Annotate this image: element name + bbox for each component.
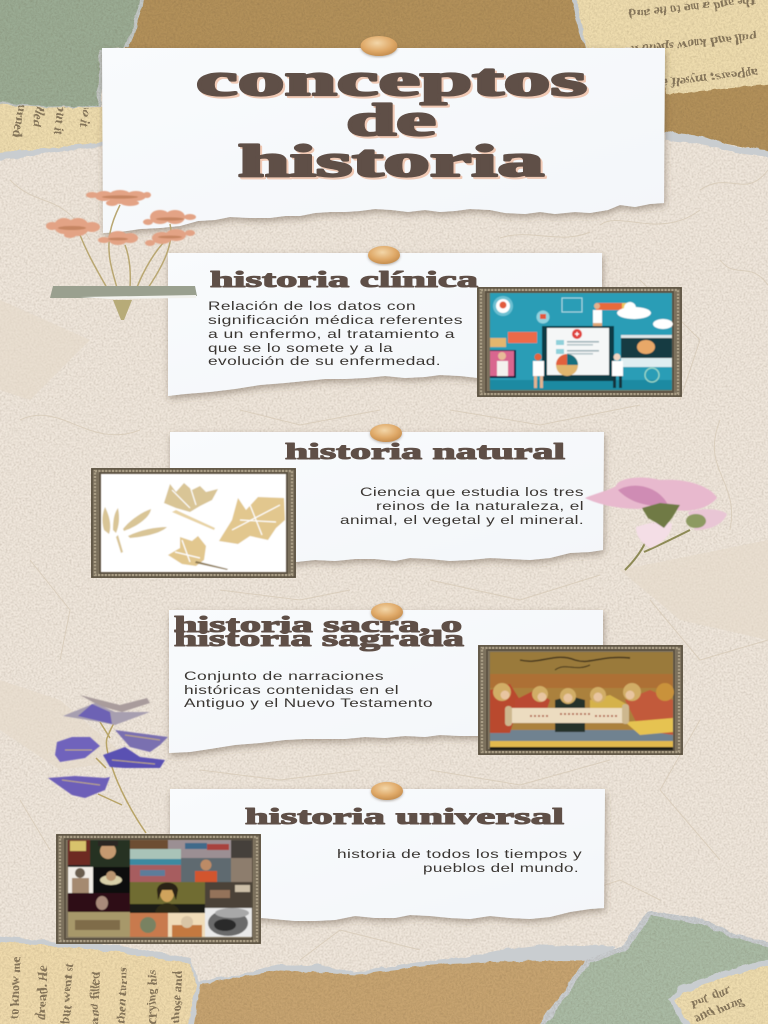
newspaper top-right: appears: myself a twist or — [615, 66, 759, 96]
newspaper bottom-left: but went st — [58, 962, 75, 1024]
heading: historia clínica — [210, 267, 479, 292]
title text: conceptos — [198, 56, 589, 107]
card paper — [169, 610, 603, 753]
heading: historia sacra, o — [174, 612, 462, 637]
panel: historia natural — [91, 424, 604, 578]
description: Ciencia que estudia los tres — [360, 485, 584, 499]
flower: purple sprig — [48, 695, 168, 833]
framed picture: pressed leaves — [91, 468, 296, 578]
newspaper left: but it — [50, 104, 70, 137]
title text: historia — [238, 135, 544, 186]
newspaper bottom-left: to know me — [6, 955, 23, 1020]
grey torn edge right — [664, 131, 768, 158]
description: históricas contenidas en el — [184, 683, 399, 697]
panel: historia clínica — [168, 246, 682, 397]
description: Relación de los datos con — [208, 299, 416, 313]
newspaper left: filled — [30, 98, 49, 129]
title text: de — [348, 96, 438, 147]
torn paper: bottom collage — [0, 911, 768, 1024]
flower: pink rose — [585, 478, 727, 570]
card paper — [170, 432, 604, 570]
heading: historia universal — [245, 804, 564, 829]
description: pueblos del mundo. — [423, 861, 579, 875]
newspaper left: so it — [77, 104, 95, 130]
newspaper bottom-right: put dur — [688, 981, 733, 1010]
newspaper top-right: to my when myself. Y — [640, 102, 761, 129]
newspaper bottom-left: then turns — [113, 966, 130, 1024]
description: historia de todos los tiempos y — [337, 847, 583, 861]
newspaper bottom-left: and filled — [86, 970, 103, 1024]
newspaper left — [0, 103, 102, 161]
newspaper top-right — [572, 0, 768, 94]
framed picture: medical illustration — [477, 287, 682, 397]
description: Antiguo y el Nuevo Testamento — [184, 696, 433, 710]
newspaper bottom-right — [668, 956, 768, 1024]
title pin — [360, 36, 398, 56]
panel: historia sacra — [169, 603, 683, 755]
grey edge above kraft — [197, 945, 616, 990]
framed picture: angels with scroll — [478, 645, 683, 755]
title text — [196, 54, 589, 188]
newspaper top-right: pull and know spend it — [629, 30, 757, 58]
torn paper: top collage — [0, 0, 768, 161]
heading: historia natural — [285, 439, 565, 464]
heading — [174, 612, 465, 651]
description: Conjunto de narraciones — [184, 669, 384, 683]
newspaper bottom-left: those and — [168, 970, 185, 1024]
panel: title card — [102, 36, 665, 233]
green paper top-left — [0, 0, 147, 110]
pin — [368, 246, 400, 264]
newspaper bottom-left: crying his — [143, 969, 160, 1024]
title text: historia — [240, 137, 546, 188]
pin — [371, 782, 403, 800]
newspaper bottom-left: dread. He — [33, 965, 50, 1020]
heading: historia sagrada — [174, 626, 465, 651]
washi tape — [50, 286, 197, 299]
title text: de — [346, 94, 436, 145]
kraft paper top — [125, 0, 768, 154]
flower: peach sprig with tape — [46, 190, 197, 320]
title text: conceptos — [196, 54, 587, 105]
panel: historia universal — [170, 782, 605, 925]
description — [337, 847, 583, 875]
description: que se lo somete y a la — [208, 341, 393, 355]
description — [340, 485, 584, 527]
newspaper bottom-left — [0, 935, 200, 1024]
newspaper left: turned — [10, 99, 31, 139]
title paper — [102, 48, 665, 233]
green paper bottom-right — [531, 911, 768, 1024]
pin — [370, 424, 402, 442]
pin — [371, 603, 403, 621]
description — [208, 299, 463, 368]
description: reinos de la naturaleza, el — [376, 499, 584, 513]
description: evolución de su enfermedad. — [208, 354, 441, 368]
framed picture: history mosaic — [56, 834, 261, 944]
description — [184, 669, 433, 710]
newspaper bottom-right: and hung — [691, 992, 746, 1024]
card paper — [168, 253, 602, 396]
description: significación médica referentes — [208, 313, 463, 327]
card paper — [170, 789, 605, 925]
kraft paper bottom — [188, 960, 598, 1024]
description: animal, el vegetal y el mineral. — [340, 513, 584, 527]
description: a un enfermo, al tratamiento a — [208, 327, 455, 341]
